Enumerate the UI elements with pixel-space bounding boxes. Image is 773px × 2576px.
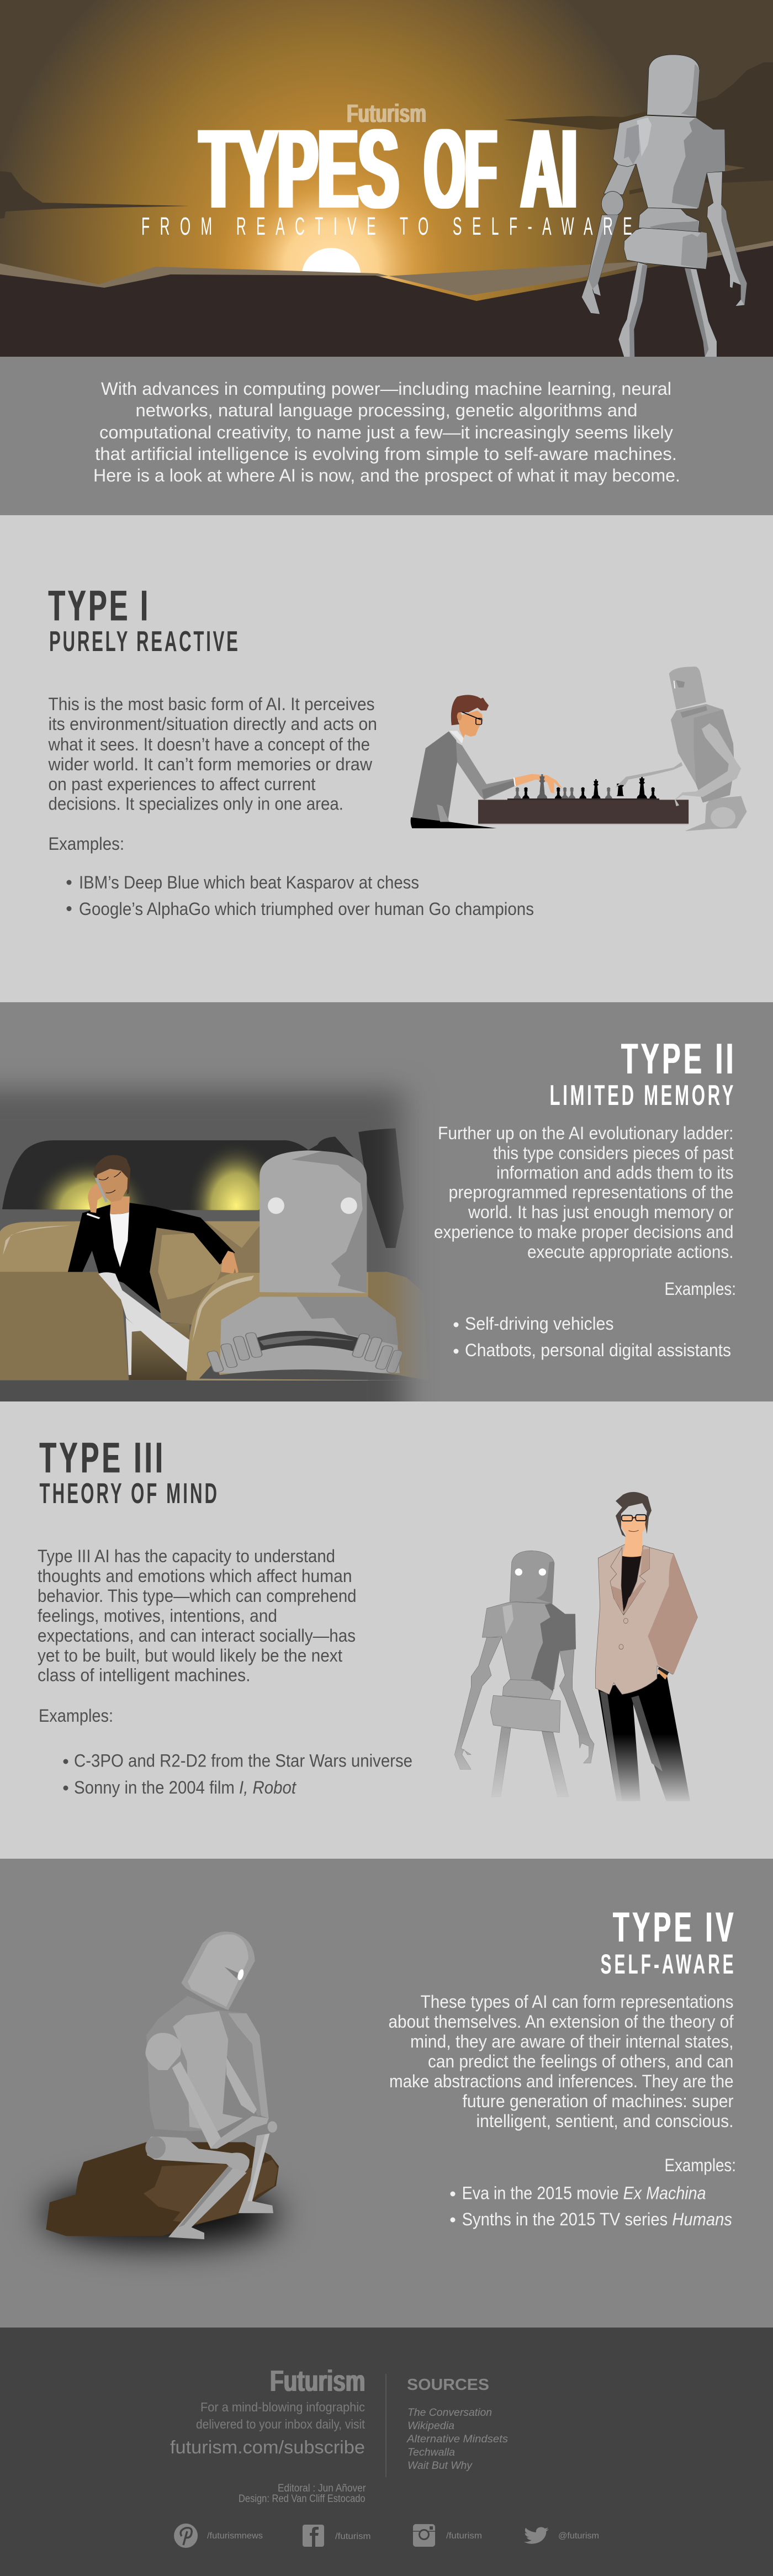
examples list (454, 1314, 731, 1360)
description text: behavior. This type—which can comprehend (38, 1586, 357, 1606)
sources heading: SOURCES (407, 2376, 489, 2394)
subheading: self-aware: SELF-AWARE (601, 1949, 734, 1980)
panel: introduction (0, 357, 773, 515)
intro text: computational creativity, to name just a few—it increasingly seems likely (99, 422, 673, 442)
subscribe text (170, 2400, 366, 2457)
robot driver (199, 1150, 428, 1380)
examples list: Self-driving vehicles (465, 1314, 614, 1334)
panel: type III theory of mind (0, 1401, 773, 1859)
sources list: Alternative Mindsets (406, 2434, 509, 2445)
logo: Futurism: Futurism (270, 2365, 366, 2398)
description text: world. It has just enough memory or (468, 1202, 734, 1222)
dark ground (0, 246, 773, 357)
panel: header hero: AI (521, 106, 577, 232)
intro text: networks, natural language processing, genetic algorithms and (136, 400, 637, 420)
description text: wider world. It can’t form memories or draw (48, 754, 373, 774)
examples label: Examples: (665, 2155, 736, 2175)
intro text (93, 379, 680, 485)
credits: Editoral : Jun Añover (278, 2483, 366, 2494)
sources list: Techwalla (407, 2447, 455, 2458)
panel: type I purely reactive (0, 515, 773, 1002)
description text: class of intelligent machines. (38, 1665, 251, 1685)
description text: information and adds them to its (496, 1163, 733, 1183)
examples list: Synths in the 2015 TV series Humans (462, 2209, 732, 2229)
intro text: that artificial intelligence is evolving from simple to self-aware machines. (95, 444, 677, 464)
examples list (66, 872, 534, 919)
examples label: Examples: (39, 1706, 113, 1726)
examples label: Examples: (49, 834, 124, 854)
subheading: limited memory: LIMITED MEMORY (550, 1080, 734, 1112)
description text: preprogrammed representations of the (448, 1182, 733, 1202)
description text: These types of AI can form representations (421, 1992, 733, 2012)
rear seats (0, 1221, 260, 1380)
logo: Futurism: Futurism (347, 99, 426, 128)
divider (385, 2374, 386, 2477)
description text: Type III AI has the capacity to understand (38, 1546, 335, 1566)
panel: header hero (0, 0, 773, 357)
dark headrests (308, 1128, 404, 1248)
sources list: The Conversation (407, 2407, 492, 2419)
examples list (63, 1750, 412, 1797)
intro text: With advances in computing power—including machine learning, neural (101, 379, 671, 399)
illustration: man and robot in self-driving car (0, 1078, 419, 1401)
sources list (406, 2407, 509, 2472)
description text: this type considers pieces of past (493, 1143, 734, 1163)
rear window with lights (2, 1140, 308, 1210)
description text: expectations, and can interact socially—has (38, 1626, 356, 1646)
man in blazer (595, 1492, 697, 1801)
description text: execute appropriate actions. (527, 1242, 733, 1262)
subtitle: FROM REACTIVE TO SELF-AWARE (141, 212, 632, 240)
description text: decisions. It specializes only in one area. (49, 794, 343, 814)
description text: can predict the feelings of others, and can (428, 2051, 733, 2071)
subheading: theory of mind: THEORY OF MIND (40, 1478, 217, 1510)
panel: type II limited memory (0, 1044, 734, 1401)
robot from behind (581, 55, 747, 357)
description text: experience to make proper decisions and (434, 1222, 733, 1242)
examples list: IBM’s Deep Blue which beat Kasparov at chess (79, 872, 419, 892)
examples list: Eva in the 2015 movie Ex Machina (462, 2183, 706, 2203)
social: facebook: /futurism (335, 2532, 371, 2541)
heading: type III: TYPE III (40, 1434, 163, 1482)
description text: future generation of machines: super (463, 2091, 734, 2111)
sun (302, 248, 361, 301)
subscribe text: futurism.com/subscribe (170, 2437, 365, 2457)
description text: make abstractions and inferences. They are the (389, 2071, 733, 2091)
intro text: Here is a look at where AI is now, and the prospect of what it may become. (93, 466, 680, 485)
shadow under rock (41, 2183, 279, 2245)
chess table (478, 798, 689, 825)
man on phone (68, 1155, 239, 1375)
social: instagram: /futurism (446, 2531, 482, 2541)
illustration: robot and man standing (454, 1492, 697, 1801)
ridge band (0, 241, 773, 298)
credits: Design: Red Van Cliff Estocado (239, 2493, 366, 2505)
description text: mind, they are aware of their internal states, (410, 2032, 733, 2051)
illustration: man and robot playing chess (411, 667, 746, 831)
description text: its environment/situation directly and acts on (49, 714, 377, 734)
examples list (451, 2183, 732, 2229)
description text: on past experiences to affect current (49, 774, 316, 794)
social: facebook (303, 2525, 371, 2547)
description text: This is the most basic form of AI. It perceives (49, 694, 374, 714)
robot (454, 1551, 594, 1797)
title: TYPES (200, 106, 399, 232)
description text: what it sees. It doesn’t have a concept of the (48, 734, 370, 754)
sources list: Wikipedia (407, 2420, 454, 2432)
description text: Further up on the AI evolutionary ladder: (438, 1123, 733, 1143)
man (411, 695, 562, 828)
robot player (615, 667, 746, 831)
right distant cliffs (504, 62, 773, 254)
left distant cliff (0, 171, 190, 219)
social: twitter (524, 2527, 599, 2544)
illustration: thinking robot on a rock (46, 1932, 279, 2239)
description text: about themselves. An extension of the theory of (389, 2012, 734, 2032)
description text (434, 1123, 734, 1262)
social: instagram (413, 2524, 482, 2547)
front seat (186, 1272, 428, 1380)
subheading: purely reactive: PURELY REACTIVE (49, 626, 238, 658)
examples label: Examples: (665, 1279, 736, 1299)
heading: type I: TYPE I (49, 581, 148, 630)
credits (239, 2483, 366, 2505)
chess pieces (513, 774, 656, 798)
subscribe text: delivered to your inbox daily, visit (196, 2417, 366, 2431)
social: pinterest: /futurismnews (207, 2531, 263, 2541)
rock (46, 2142, 279, 2236)
examples list: Chatbots, personal digital assistants (465, 1340, 731, 1360)
panel: type IV self-aware (0, 1859, 773, 2328)
heading: type IV: TYPE IV (613, 1903, 734, 1951)
sources list: Wait But Why (407, 2460, 473, 2472)
subscribe text: For a mind-blowing infographic (200, 2400, 365, 2414)
social: pinterest (174, 2524, 263, 2548)
title: OF (425, 106, 496, 232)
panel: footer (0, 2328, 773, 2576)
description text (38, 1546, 357, 1685)
examples list: Sonny in the 2004 film I, Robot (74, 1778, 297, 1797)
examples list: C-3PO and R2-D2 from the Star Wars universe (74, 1750, 412, 1770)
description text: feelings, motives, intentions, and (38, 1606, 277, 1626)
description text: thoughts and emotions which affect human (38, 1566, 352, 1586)
heading: type II: TYPE II (621, 1035, 734, 1083)
social: twitter: @futurism (558, 2531, 599, 2541)
description text (48, 694, 377, 814)
description text (389, 1992, 734, 2131)
examples list: Google’s AlphaGo which triumphed over human Go champions (79, 899, 534, 919)
description text: yet to be built, but would likely be the next (38, 1646, 342, 1665)
description text: intelligent, sentient, and conscious. (476, 2111, 733, 2131)
steering wheel and fingers (207, 1331, 404, 1373)
robot figure (145, 1932, 277, 2239)
